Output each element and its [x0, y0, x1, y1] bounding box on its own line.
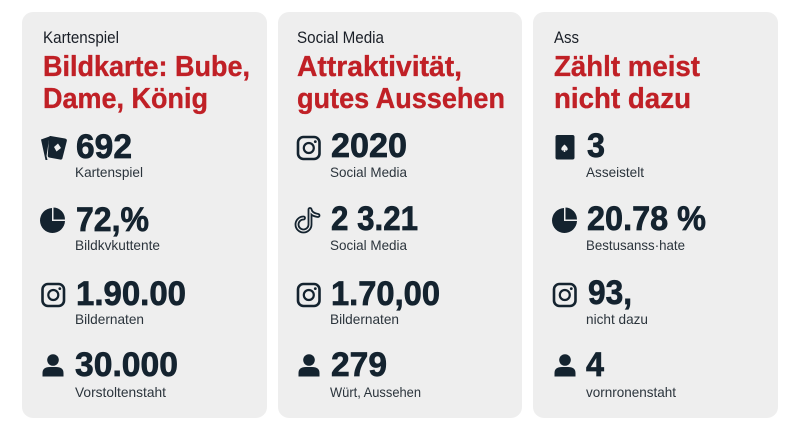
heading: Bildkarte: Dame, König — [43, 83, 208, 115]
stat: 20.78 %: 20.78 % — [587, 200, 706, 238]
category label: Kartenspiel: Kartenspiel — [43, 29, 119, 47]
heading: Bildkarte: Bildkarte: Bube, — [43, 51, 250, 83]
stat: 4 — [586, 346, 676, 400]
icon: ace of spades card — [556, 135, 574, 160]
stat: 2 3.21: 2 3.21 — [331, 200, 418, 238]
stat: 3: Asseistelt — [586, 164, 644, 180]
stat: 72,%: 72,% — [76, 201, 149, 239]
stat: 1.90.00: Bildernaten — [75, 311, 144, 327]
stat: 1.70,00: Bildernaten — [330, 311, 399, 327]
stat: 2 3.21: Social Media — [330, 237, 407, 253]
stat: 72,%: Bildkvkuttente — [75, 237, 160, 253]
icon: instagram — [298, 137, 320, 159]
heading: Attraktivität — [297, 51, 505, 115]
stat: 692: Kartenspiel — [75, 164, 143, 180]
stat: 30.000: Vorstoltenstaht — [75, 384, 166, 400]
category label: Ass: Ass — [554, 29, 579, 47]
stat: 30.000 — [75, 346, 178, 400]
stat: 692 — [75, 128, 143, 180]
heading: Attraktivität: gutes Aussehen — [297, 83, 505, 115]
stat: 279: Würt, Aussehen — [330, 384, 421, 400]
stat: 72,% — [75, 201, 160, 253]
category label: Social Media: Social Media — [297, 29, 385, 47]
icon: playing cards — [41, 136, 67, 160]
heading: Zählt meist nicht dazu: nicht dazu — [554, 83, 691, 115]
stat: 2020: 2020 — [331, 127, 407, 165]
stat: 93,: 93, — [588, 274, 632, 312]
stat: 20.78 %: Bestusanss·hate — [586, 237, 685, 253]
stat: 3 — [586, 127, 644, 180]
icon: pie chart — [40, 208, 65, 233]
stat: 1.70,00: 1.70,00 — [331, 275, 440, 313]
stat: 4: 4 — [586, 346, 604, 384]
stat: 4: vornronenstaht — [586, 384, 676, 400]
icon: instagram — [554, 284, 576, 306]
heading: Zählt meist nicht dazu — [554, 51, 700, 115]
stat: 30.000: 30.000 — [75, 346, 178, 384]
heading: Bildkarte — [43, 51, 250, 115]
stat: 20.78 % — [586, 200, 706, 253]
stat: 279: 279 — [331, 346, 387, 384]
stat: 2020: Social Media — [330, 164, 407, 180]
stat: 692: 692 — [76, 128, 132, 166]
stat: 279 — [330, 346, 421, 400]
icon: instagram — [298, 284, 320, 306]
heading: Zählt meist nicht dazu: Zählt meist — [554, 51, 700, 83]
icon: instagram — [42, 284, 64, 306]
stat: 1.90.00: 1.90.00 — [76, 275, 186, 313]
panel: Kartenspiel — [22, 12, 267, 418]
icon: pie chart — [552, 208, 577, 233]
icon: person — [42, 354, 64, 376]
icon: tiktok — [297, 210, 318, 231]
panel: Ass — [533, 12, 778, 418]
panel: Social Media — [278, 12, 522, 418]
stat: 93,: nicht dazu — [586, 311, 648, 327]
heading: Attraktivität: Attraktivität, — [297, 51, 462, 83]
stat: 3: 3 — [587, 127, 605, 165]
stat: 2 3.21 — [330, 200, 418, 253]
icon: person — [554, 354, 576, 376]
stat: 93, — [586, 274, 648, 327]
icon: person — [298, 354, 320, 376]
